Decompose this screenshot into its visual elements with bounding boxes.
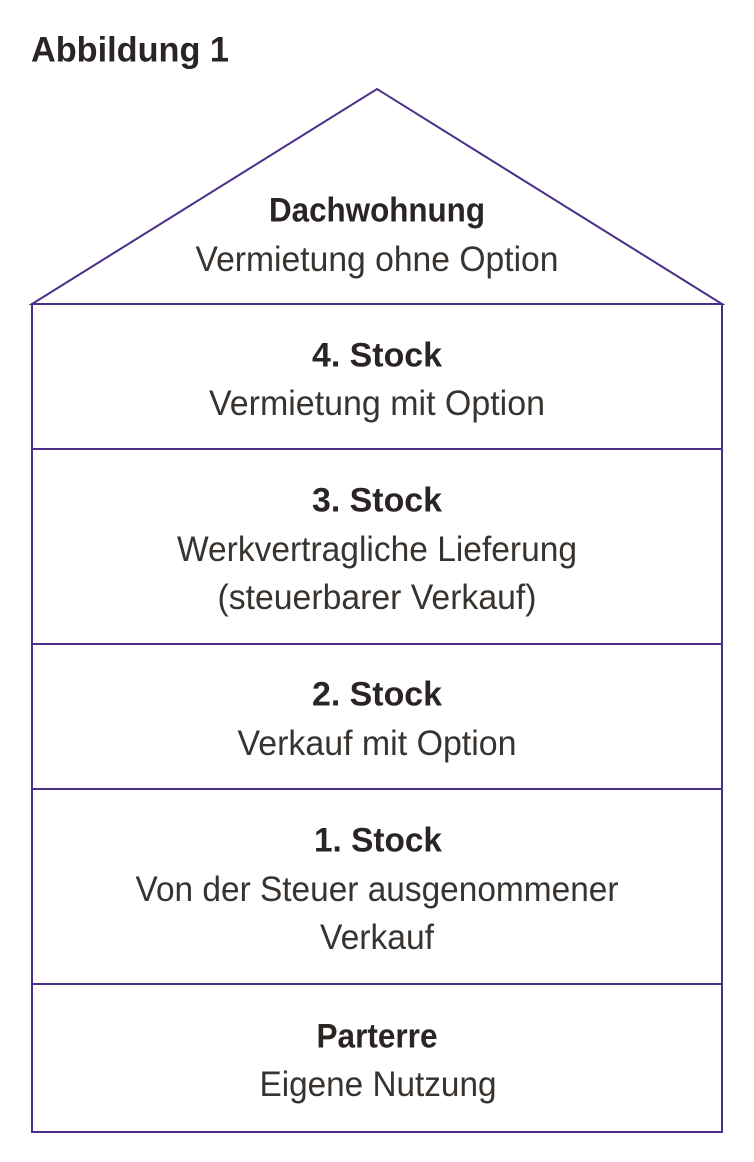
floor: 2. Stock: Verkauf mit Option (238, 724, 516, 763)
floor: 4. Stock: Vermietung mit Option (209, 384, 545, 423)
floor: Parterre (260, 1018, 496, 1104)
floor: Parterre: Eigene Nutzung (260, 1065, 496, 1104)
floor: Dachwohnung (196, 192, 558, 279)
floor: Dachwohnung: Vermietung ohne Option (196, 240, 558, 279)
floor: 1. Stock (136, 822, 619, 957)
floor: 4. Stock (209, 336, 545, 423)
floor: 1. Stock: 1. Stock (314, 822, 443, 860)
roof outline (32, 89, 722, 304)
floor: Dachwohnung: Dachwohnung (269, 192, 485, 230)
floor: 4. Stock: 4. Stock (312, 336, 443, 374)
floor: 3. Stock: 3. Stock (312, 482, 443, 520)
floors outline (32, 304, 722, 1132)
floor: 3. Stock: (steuerbarer Verkauf) (218, 578, 536, 617)
title: Abbildung 1 (31, 30, 229, 70)
floor: 3. Stock (177, 482, 577, 617)
floor: 1. Stock: Verkauf (320, 918, 434, 957)
floor: 2. Stock (238, 676, 516, 763)
floor: 2. Stock: 2. Stock (312, 676, 443, 714)
floor: 3. Stock: Werkvertragliche Lieferung (177, 530, 577, 569)
floor: 1. Stock: Von der Steuer ausgenommener (136, 870, 619, 909)
floor: Parterre: Parterre (316, 1018, 438, 1056)
